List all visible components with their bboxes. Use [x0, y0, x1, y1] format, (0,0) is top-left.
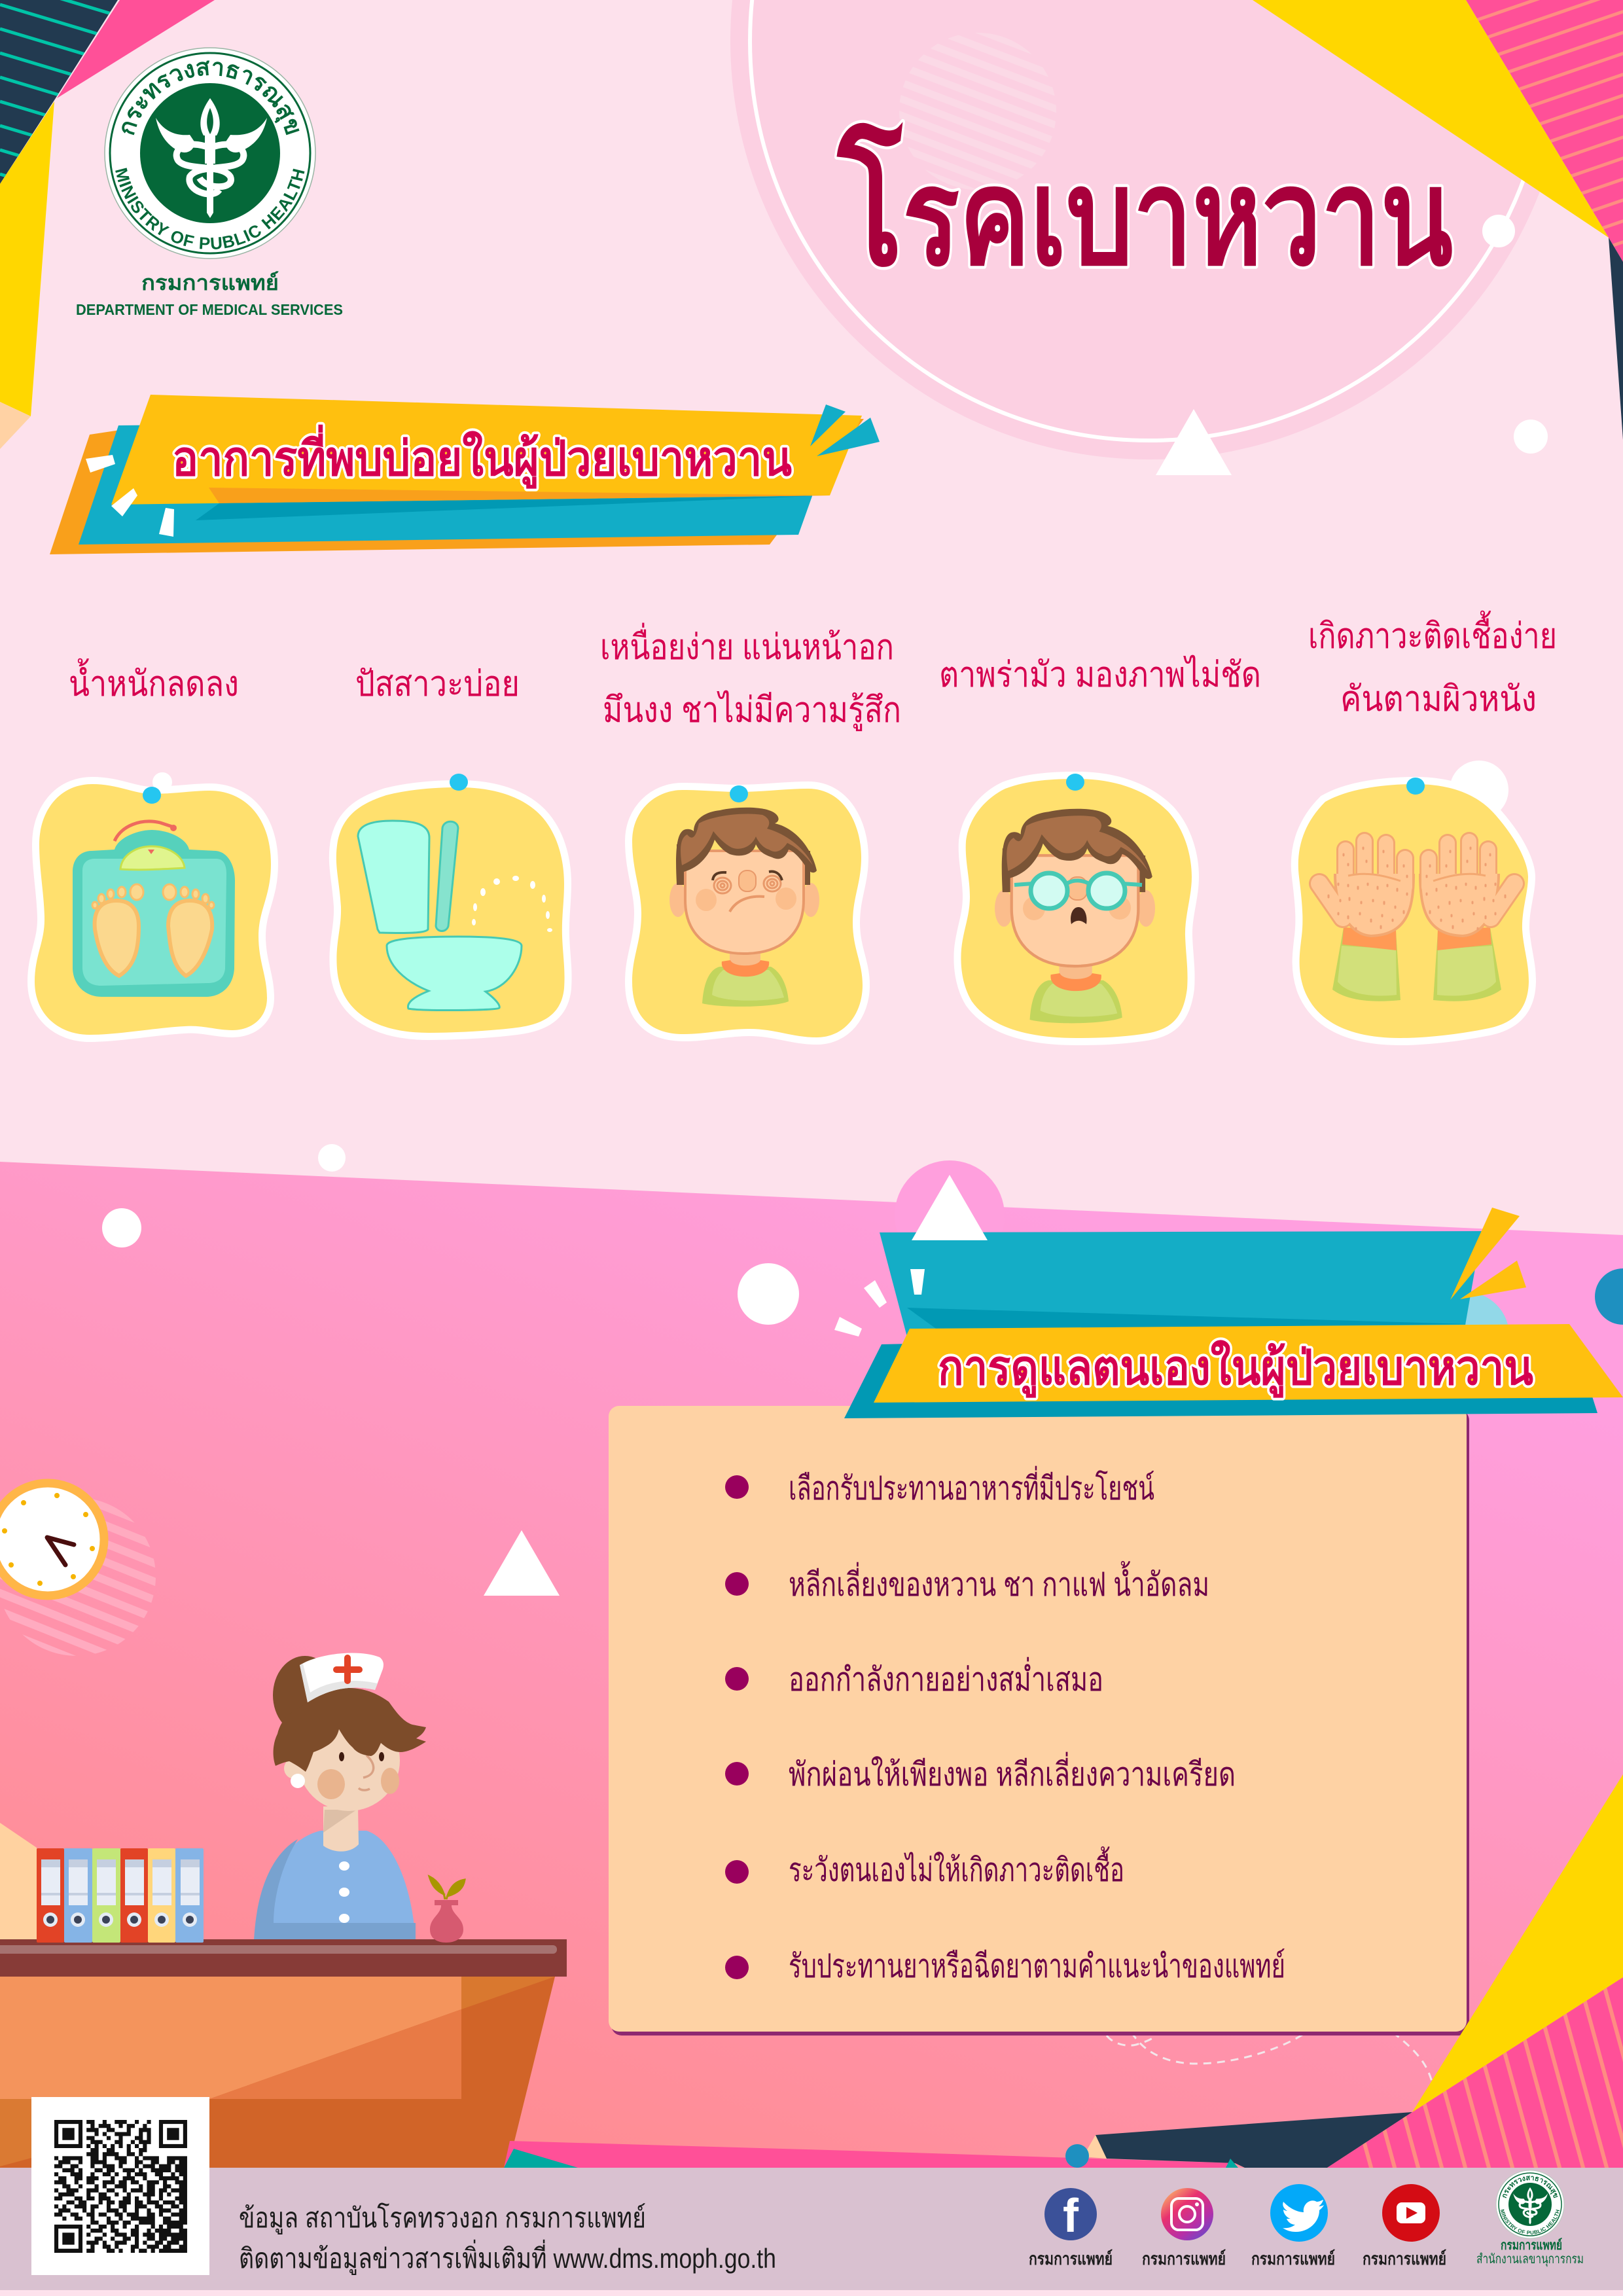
- footer source text: ข้อมูล สถาบันโรคทรวงอก กรมการแพทย์: [239, 2202, 646, 2234]
- symptom label 3: [600, 622, 901, 731]
- icon: bathroom scale: [73, 821, 235, 997]
- QR code: [31, 2097, 209, 2275]
- symptom label 5: คันตามผิวหนัง: [1340, 679, 1537, 719]
- symptom label 2: ปัสสาวะบ่อย: [355, 664, 520, 704]
- icon: flower vase: [429, 1876, 465, 1943]
- title: โรคเบาหวาน: [836, 122, 1453, 296]
- symptom label 4: ตาพร่ามัว มองภาพไม่ชัด: [939, 655, 1261, 694]
- binders on desk: [37, 1848, 204, 1943]
- icon: twitter: [1251, 2184, 1335, 2269]
- banner 2 front ribbon: [844, 1324, 1623, 1418]
- nurse illustration: [254, 1653, 426, 1941]
- list item 4: พักผ่อนให้เพียงพอ หลีกเลี่ยงความเครียด: [789, 1752, 1236, 1793]
- list item 1: [725, 1466, 1154, 1507]
- footer bar: [0, 2168, 1623, 2290]
- banner 2 front ribbon: การดูแลตนเองในผู้ป่วยเบาหวาน: [938, 1339, 1533, 1398]
- icon: facebook: f: [1063, 2190, 1079, 2242]
- icon: twitter: กรมการแพทย์: [1251, 2249, 1335, 2269]
- list item 6: [725, 1948, 1285, 1984]
- symptom label 5: เกิดภาวะติดเชื้อง่าย: [1308, 611, 1557, 656]
- icon: youtube: [1363, 2184, 1446, 2269]
- panel: self care list: [609, 1406, 1469, 2036]
- bottom decorative band: [504, 2112, 1412, 2168]
- small ministry logo in footer: กระทรวงสาธารณสุข: [1503, 2176, 1558, 2198]
- list item 2: หลีกเลี่ยงของหวาน ชา กาแฟ น้ำอัดลม: [789, 1561, 1209, 1603]
- list item 4: [725, 1752, 1236, 1793]
- symptom label 3: มึนงง ชาไม่มีความรู้สึก: [603, 690, 901, 731]
- icon: facebook: กรมการแพทย์: [1029, 2249, 1113, 2269]
- icon: youtube: กรมการแพทย์: [1363, 2249, 1446, 2269]
- icon: hands with rash: [1319, 841, 1514, 1001]
- decorative dots lower section: [102, 1144, 1623, 1325]
- card: weight scale: [35, 772, 271, 1035]
- symptom label 1: น้ำหนักลดลง: [69, 658, 239, 704]
- list item 5: [725, 1846, 1124, 1888]
- icon: boy with dizzy eyes: [669, 808, 819, 1007]
- banner: symptoms heading: [50, 395, 880, 554]
- card: dizzy boy: [632, 785, 863, 1037]
- logo: Ministry of Public Health: [104, 47, 316, 259]
- small ministry logo in footer: [1476, 2170, 1584, 2267]
- symptom label 5: [1308, 611, 1557, 719]
- desk: [0, 1939, 567, 2168]
- banner: self care heading: [834, 1175, 1526, 1378]
- list item 2: [725, 1561, 1209, 1603]
- banner: symptoms heading: อาการที่พบบ่อยในผู้ป่วยเบาหวาน: [172, 424, 792, 489]
- icon: toilet: [358, 821, 522, 1011]
- list item 3: [725, 1657, 1103, 1698]
- card: blurred vision boy: [961, 774, 1192, 1038]
- logo caption: department name Thai: กรมการแพทย์: [141, 271, 279, 295]
- icon: boy with glasses: [995, 809, 1155, 1023]
- icon: instagram: [1142, 2188, 1226, 2269]
- small ministry logo in footer: MINISTRY OF PUBLIC HEALTH: [1500, 2210, 1560, 2234]
- top-right corner shapes: [1253, 0, 1623, 440]
- list item 6: รับประทานยาหรือฉีดยาตามคำแนะนำของแพทย์: [789, 1948, 1285, 1984]
- icon: facebook: [1029, 2188, 1113, 2269]
- footer follow text: ติดตามข้อมูลข่าวสารเพิ่มเติมที่ www.dms.moph.go.th: [239, 2240, 776, 2275]
- top-left corner shapes: [0, 0, 215, 449]
- dashed decorative curves: [1107, 2032, 1432, 2082]
- large pink title circle: [730, 0, 1568, 459]
- card: skin rash hands: [1298, 761, 1529, 1038]
- icon: wall clock: [0, 1483, 104, 1596]
- striped circle behind clock: [0, 1499, 156, 1656]
- logo: Ministry of Public Health: MINISTRY OF PUBLIC HEALTH: [115, 168, 305, 249]
- list item 5: ระวังตนเองไม่ให้เกิดภาวะติดเชื้อ: [789, 1846, 1124, 1888]
- icon: instagram: กรมการแพทย์: [1142, 2249, 1226, 2269]
- card: toilet: [336, 774, 565, 1033]
- bottom-right striped triangle: [1315, 1774, 1623, 2179]
- small ministry logo in footer: สำนักงานเลขานุการกรม: [1476, 2252, 1584, 2267]
- logo: Ministry of Public Health: กระทรวงสาธารณสุข: [122, 60, 300, 135]
- small ministry logo in footer: กรมการแพทย์: [1501, 2238, 1562, 2253]
- list item 1: เลือกรับประทานอาหารที่มีประโยชน์: [789, 1466, 1154, 1507]
- list item 3: ออกกำลังกายอย่างสม่ำเสมอ: [789, 1657, 1103, 1698]
- symptom label 3: เหนื่อยง่าย แน่นหน้าอก: [600, 622, 894, 667]
- logo caption: department name English: DEPARTMENT OF MEDICAL SERVICES: [76, 301, 343, 318]
- peach triangle behind binders: [0, 1823, 37, 1939]
- white triangle lower: [484, 1530, 560, 1596]
- decorative white triangle and dots: [1156, 215, 1548, 475]
- lower pink background: [0, 1162, 1623, 2168]
